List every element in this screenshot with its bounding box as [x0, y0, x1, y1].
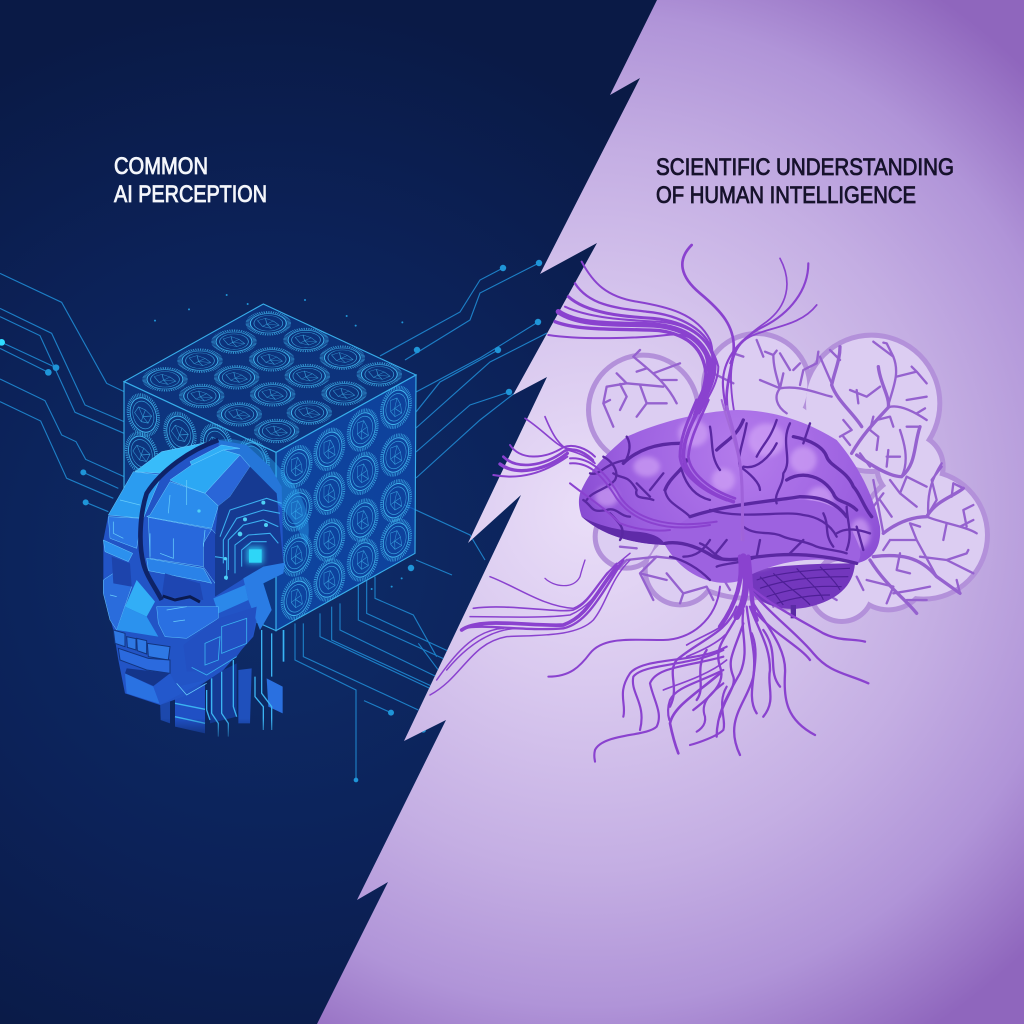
jaw panel [183, 607, 257, 672]
heading: scientific understanding of human intelligence: SCIENTIFIC UNDERSTANDING [656, 154, 954, 181]
gears: left face [121, 391, 274, 484]
circuits around ear [215, 498, 282, 580]
nerve bundle: upper strands [548, 245, 817, 513]
icon: brain [570, 400, 880, 618]
icon: holographic data cube [121, 304, 416, 631]
strands over brain [680, 400, 743, 540]
mouth blocks [113, 630, 170, 673]
glowing chip [247, 547, 263, 563]
dendrite trees: left and lower lobes [603, 340, 837, 607]
cloud inner fill [591, 336, 985, 619]
cheek [157, 607, 218, 638]
translucent dome over cube [218, 439, 309, 547]
nerve bundle: left middle strands [493, 417, 595, 477]
temporal lobe [665, 500, 860, 583]
circuit traces network [0, 260, 547, 782]
icon: branching dendrite cloud [587, 332, 989, 623]
heading: common AI perception: COMMON [114, 153, 208, 180]
panel: dark navy AI side with jagged divider [0, 0, 657, 1024]
right skull plates [147, 445, 250, 583]
under brow shadow [112, 557, 132, 587]
heading: scientific understanding of human intelligence [656, 154, 954, 209]
face line details [110, 480, 207, 695]
highlights [595, 420, 870, 569]
left skull plates [103, 440, 218, 630]
icon: robot head [103, 439, 309, 705]
nerve roots: lower tendrils [594, 623, 727, 762]
nerve roots: central trunk and right tendrils [670, 557, 868, 755]
chin and jaw [125, 668, 207, 705]
nose [117, 580, 158, 637]
dendrite trees: right lobes [760, 342, 977, 613]
crack between hemispheres [140, 440, 218, 600]
cloud outer ring [587, 332, 989, 623]
cerebrum silhouette [579, 410, 880, 582]
sulci folds [583, 420, 872, 580]
circuit nodes [197, 501, 268, 580]
gears: right face [277, 384, 416, 622]
darker underside [582, 517, 665, 545]
ear connector [243, 563, 285, 630]
heading: scientific understanding of human intelligence: OF HUMAN INTELLIGENCE [656, 182, 916, 209]
heading: common AI perception [114, 153, 267, 208]
eye socket [162, 573, 203, 600]
nerve bundle: lower left strands [430, 553, 720, 695]
gears: top face [144, 312, 400, 442]
heading: common AI perception: AI PERCEPTION [114, 181, 267, 208]
upper cheek plate [213, 585, 248, 613]
cerebellum [743, 563, 855, 609]
strands crossing frontal lobe [570, 458, 717, 531]
side circuitry panel [215, 467, 283, 597]
cube faces [124, 304, 416, 631]
icon: robot head neck circuits [160, 630, 283, 737]
head base silhouette [103, 440, 283, 705]
